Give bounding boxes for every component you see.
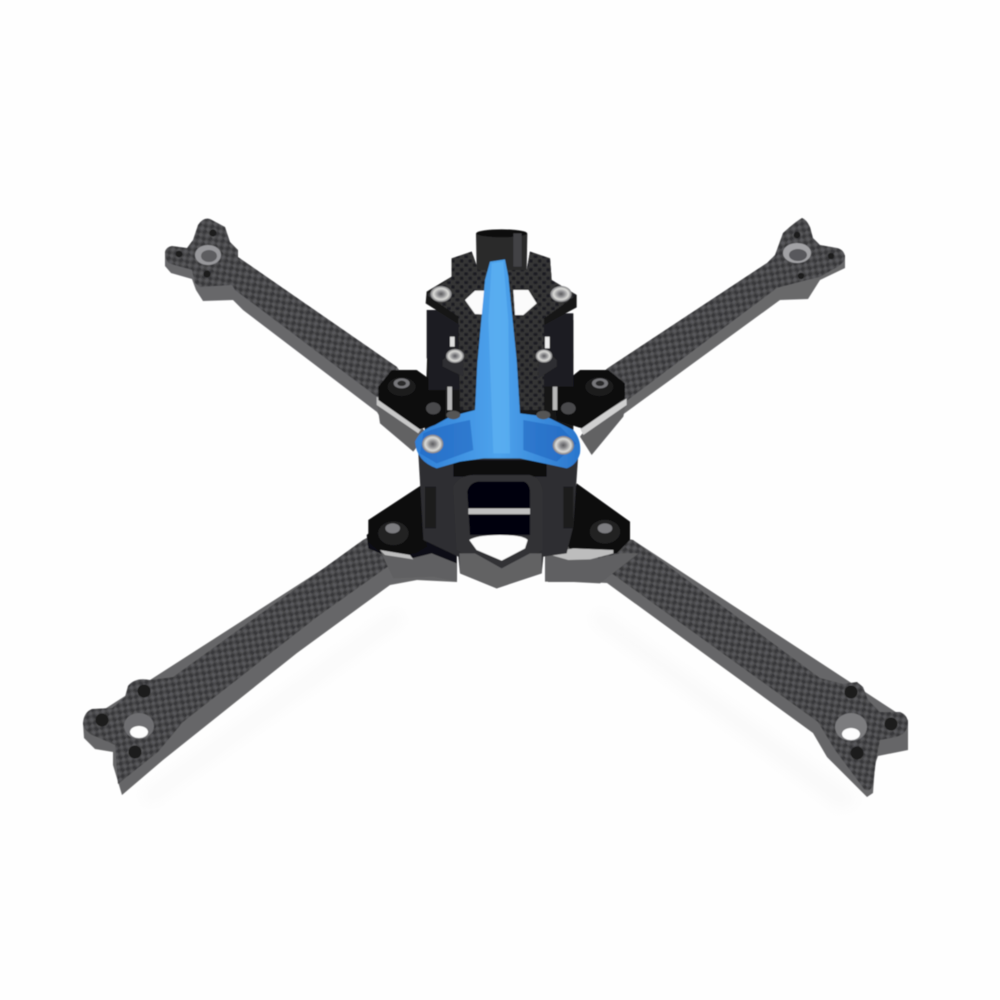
body lower block [418,453,578,588]
arm: front right [548,530,908,797]
top carbon plate [426,252,577,410]
centre assembly traced in zoom coordinates [367,229,638,588]
arm plate: front right [545,483,638,583]
dark core filler [423,320,573,520]
hex screws [422,286,574,455]
arm: rear right [590,218,845,430]
soft floor shadows [140,610,860,810]
arm plate: front left [367,485,457,582]
arm plate: rear right [555,370,627,455]
camera opening [453,475,543,588]
blue TPU mount [415,259,580,468]
plate hexagon window [465,290,537,315]
arm: rear left [165,219,420,425]
arm plate: rear left [377,370,445,452]
standoffs [427,310,573,410]
arm: front left [83,520,457,795]
antenna mount tube [476,229,527,277]
